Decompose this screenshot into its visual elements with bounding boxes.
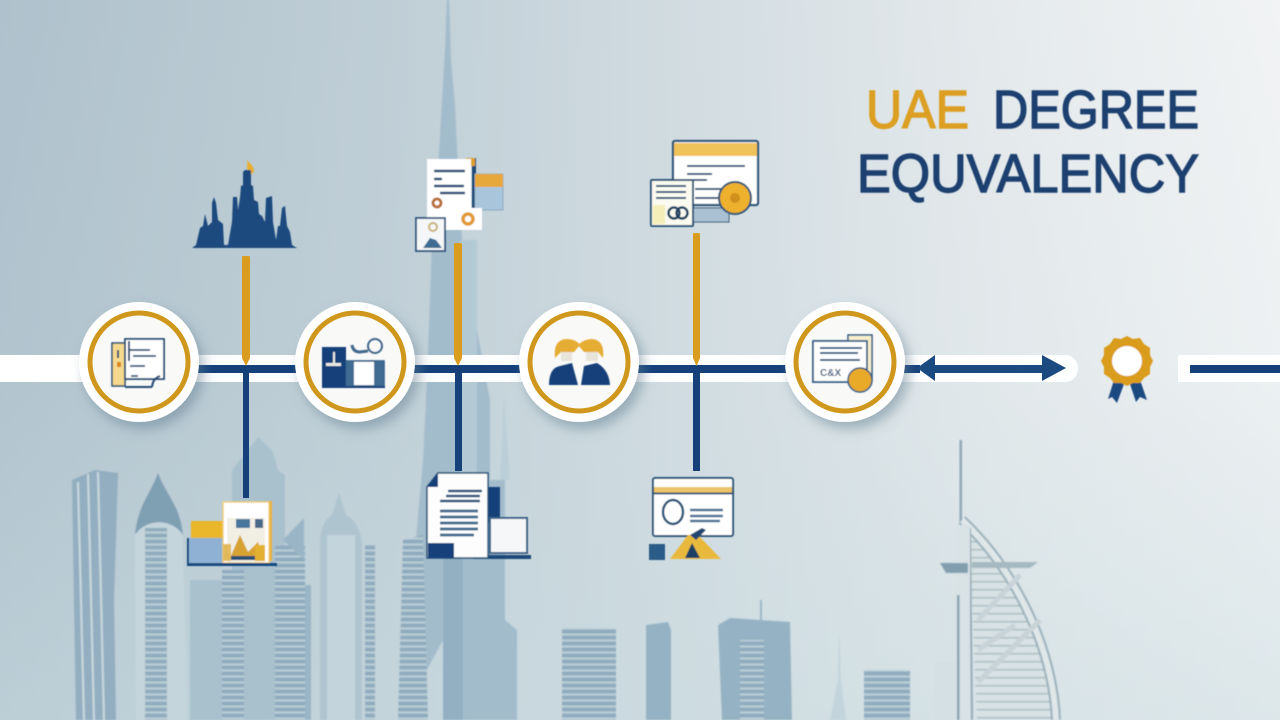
icon: two people [549, 339, 610, 385]
tapered tower [320, 493, 375, 720]
right low towers [562, 600, 958, 720]
Burj Al Arab sail [940, 440, 1056, 720]
arrow: double-headed end arrow [917, 355, 1066, 381]
title: EQUVALENCY [857, 144, 1199, 204]
connector 3 [693, 233, 700, 471]
timeline bar continuation [1178, 355, 1280, 382]
title [857, 80, 1199, 204]
step circle 1 [79, 302, 199, 422]
icon: document and laptop (bottom centre) [427, 473, 531, 559]
title: DEGREE [993, 80, 1199, 140]
icon: desk and lamp [322, 339, 385, 388]
mid towers [190, 437, 311, 720]
icon: browser window (bottom right) [649, 478, 733, 560]
connector 1 [242, 256, 250, 498]
icon: rosette award [1101, 336, 1153, 403]
step circle 4 [785, 302, 905, 422]
Burj Khalifa tower [400, 0, 517, 720]
icon: documents [112, 339, 164, 387]
icon: skyline (top left) [192, 160, 297, 248]
timeline bar [0, 355, 1078, 382]
skyline: Dubai towers background [72, 0, 1056, 720]
step circle 3 [519, 302, 639, 422]
icon: certificate with medal (top right) [651, 141, 758, 226]
icon: poster and folder (bottom left) [187, 501, 277, 566]
icon: certificate with seal: C&X [820, 368, 841, 379]
striped tower [398, 535, 428, 720]
title: UAE [866, 80, 969, 140]
connector 2 [454, 243, 462, 471]
domed tower [135, 473, 187, 720]
twisted tower [72, 470, 118, 720]
icon: stacked documents (top centre) [416, 158, 503, 251]
step circle 2 [295, 302, 415, 422]
